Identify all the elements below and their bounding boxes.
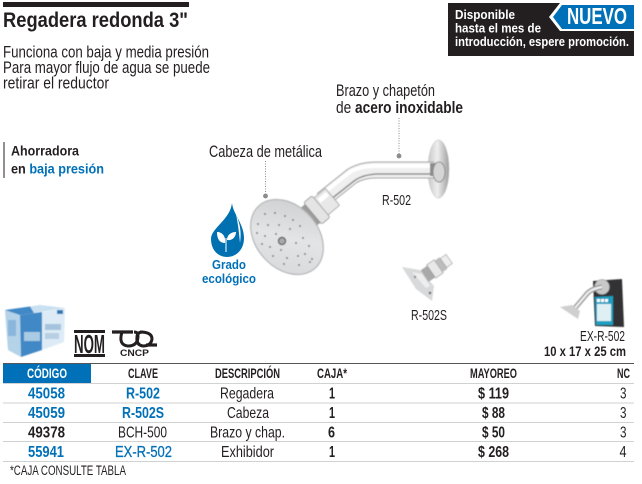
label: R-502S: R-502S	[411, 308, 447, 324]
row: 45059: Cabeza	[227, 405, 269, 422]
footnote: *CAJA CONSULTE TABLA	[10, 463, 126, 478]
title block	[3, 2, 189, 32]
row: 49378: 6	[328, 424, 335, 442]
table header: CÓDIGO	[27, 366, 67, 381]
product image: EX-R-502 display	[560, 279, 624, 327]
icon: CNCP logo	[112, 332, 157, 359]
row: 45058: 1	[329, 386, 335, 402]
row: 55941	[28, 444, 627, 461]
panel: nuevo promotion: Disponible	[455, 7, 515, 22]
row: 45058: $ 119	[478, 386, 509, 402]
icon: NOM mark: NOM	[74, 329, 105, 359]
table header	[3, 364, 630, 383]
arm	[322, 162, 445, 200]
label: brazo y chapeton	[336, 82, 463, 158]
product image: packaging box	[5, 305, 65, 357]
row: 45059: 3	[620, 405, 627, 422]
label: cabeza de metalica	[209, 143, 323, 198]
callout: ahorradora en baja presion	[4, 142, 104, 178]
row: 49378: 49378	[28, 424, 65, 442]
row: 45059: 1	[329, 405, 335, 422]
row: 49378: $ 50	[482, 424, 505, 442]
row: 55941: 4	[620, 444, 627, 461]
row: 55941: EX-R-502	[115, 444, 172, 461]
label: EX-R-502 and size: EX-R-502	[580, 329, 625, 345]
row: 45058: 3	[620, 386, 627, 402]
row: 45059: 45059	[28, 405, 65, 422]
icon: grado ecologico drop	[202, 203, 256, 286]
icon: NOM mark	[74, 329, 105, 359]
icon: grado ecologico drop: ecológico	[202, 271, 256, 286]
flange	[428, 140, 449, 198]
description text: Para mayor flujo de agua se puede	[3, 59, 210, 77]
row: 49378: Brazo y chap.	[210, 424, 285, 442]
row: 55941: 1	[329, 444, 335, 461]
label: R-502: R-502	[382, 193, 411, 209]
table header: MAYOREO	[470, 366, 517, 381]
label: EX-R-502 and size	[544, 329, 626, 359]
label: cabeza de metalica: Cabeza de metálica	[209, 143, 323, 161]
panel: nuevo promotion: hasta el mes de	[455, 21, 541, 36]
table header: CLAVE	[128, 366, 158, 381]
description text: Funciona con baja y media presión	[3, 44, 209, 62]
callout: ahorradora en baja presion: en baja presión	[11, 160, 104, 176]
row: 49378: BCH-500	[118, 424, 167, 442]
badge: nuevo	[549, 3, 634, 31]
row: 45058: R-502	[126, 386, 160, 402]
row: 45059	[28, 405, 627, 422]
callout: ahorradora en baja presion: Ahorradora	[11, 142, 79, 158]
product image: R-502 shower	[236, 140, 449, 289]
title block: Regadera redonda 3"	[3, 9, 188, 32]
row: 55941: 55941	[28, 444, 64, 461]
description text	[3, 44, 210, 93]
row: 45058: Regadera	[220, 386, 274, 402]
product image: R-502S head	[402, 252, 454, 301]
row: 49378: 3	[620, 424, 627, 442]
row: 55941: $ 268	[478, 444, 509, 461]
label: brazo y chapeton: Brazo y chapetón	[336, 82, 435, 100]
row: 49378	[28, 424, 627, 442]
panel: nuevo promotion	[448, 3, 634, 56]
icon: CNCP logo: CNCP	[120, 348, 150, 359]
connector	[299, 186, 342, 228]
table	[3, 363, 634, 462]
icon: grado ecologico drop: Grado	[212, 257, 246, 272]
description text: retirar el reductor	[3, 75, 109, 93]
row: 55941: Exhibidor	[221, 444, 275, 461]
row: 45058: 45058	[28, 386, 65, 402]
row: 45059: $ 88	[482, 405, 505, 422]
row: 45059: R-502S	[122, 405, 164, 422]
head	[236, 185, 338, 289]
table header: CAJA*	[317, 366, 348, 381]
label: brazo y chapeton: de acero inoxidable	[336, 99, 463, 117]
table header: DESCRIPCIÓN	[215, 366, 280, 381]
row: 45058	[28, 386, 627, 402]
table header: NC	[617, 366, 630, 381]
